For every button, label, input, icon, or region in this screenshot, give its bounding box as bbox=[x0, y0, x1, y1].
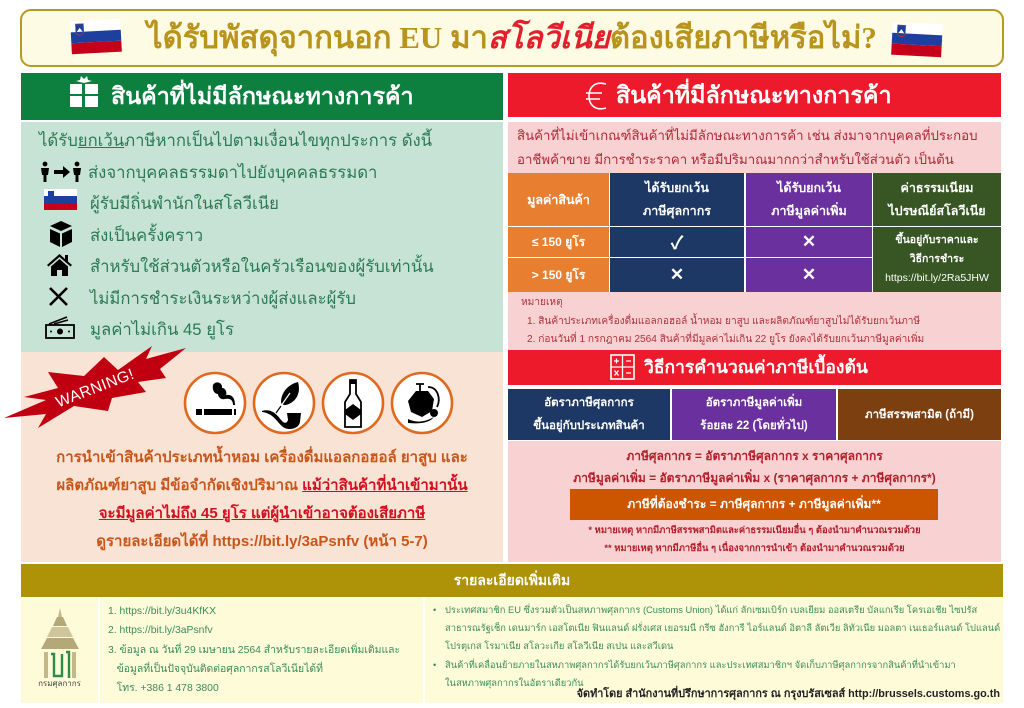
condition 2: ผู้รับมีถิ่นพำนักในสโลวีเนีย bbox=[90, 194, 279, 213]
panel: EU information: สาธารณรัฐเช็ก เดนมาร์ก เอสโตเนีย ฟินแลนด์ ฝรั่งเศส เยอรมนี กรีซ ฮังการี ไอร์แลนด์ อิตาลี ลัตเวีย ลิทัวเนีย มอลตา เนเธอร์แลนด์ โปแลนด์ bbox=[445, 623, 1000, 633]
condition 1: ส่งจากบุคคลธรรมดาไปยังบุคคลธรรมดา bbox=[88, 163, 377, 182]
icon: cross bbox=[49, 287, 68, 306]
rate: customs: อัตราภาษีศุลกากร bbox=[544, 396, 634, 408]
header: value: มูลค่าสินค้า bbox=[527, 192, 590, 206]
icon: gift bbox=[70, 76, 98, 107]
credit line: จัดทำโดย สำนักงานที่ปรึกษาการศุลกากร ณ กรุงบรัสเซลส์ http://brussels.customs.go.th bbox=[577, 688, 1000, 700]
rate: VAT: อัตราภาษีมูลค่าเพิ่ม bbox=[706, 396, 802, 408]
icon: calculator bbox=[610, 354, 635, 380]
cell: VAT cross 2: ✕ bbox=[802, 265, 816, 284]
header: postal fee: ไปรษณีย์สโลวีเนีย bbox=[888, 204, 986, 218]
panel: more details heading bbox=[21, 564, 1003, 597]
condition 4: สำหรับใช้ส่วนตัวหรือในครัวเรือนของผู้รับเท่านั้น bbox=[90, 257, 434, 276]
cell: postal details: https://bit.ly/2Ra5JHW bbox=[885, 272, 989, 284]
conditions intro: ได้รับยกเว้นภาษีหากเป็นไปตามเงื่อนไขทุกประการ ดังนี้ bbox=[39, 131, 432, 150]
panel: non-commercial heading bbox=[21, 73, 503, 120]
contact info: โทร. +386 1 478 3800 bbox=[117, 683, 219, 694]
formula: total: ภาษีที่ต้องชำระ = ภาษีศุลกากร + ภาษีมูลค่าเพิ่ม** bbox=[627, 497, 881, 511]
contact info: ข้อมูลที่เป็นปัจจุบันติดต่อศุลกากรสโลวีเนียได้ที่ bbox=[117, 664, 323, 675]
note heading: หมายเหตุ bbox=[521, 297, 563, 308]
panel: logo bbox=[21, 598, 98, 703]
warning text line 4: ดูรายละเอียดได้ที่ https://bit.ly/3aPsnfv (หน้า 5-7) bbox=[96, 533, 428, 550]
header: customs exempt bbox=[610, 173, 744, 226]
panel: commercial description bbox=[508, 122, 1001, 173]
logo caption: กรมศุลกากร bbox=[38, 679, 81, 688]
icon: person to person bbox=[41, 162, 81, 182]
cell: postal details: ขึ้นอยู่กับราคาและ bbox=[895, 234, 979, 246]
cell: VAT cross 1: ✕ bbox=[802, 232, 816, 251]
condition 6: มูลค่าไม่เกิน 45 ยูโร bbox=[90, 320, 234, 339]
panel: notes bbox=[508, 292, 1001, 350]
row label: over 150: > 150 ยูโร bbox=[532, 268, 585, 282]
cell: customs check bbox=[610, 227, 744, 257]
panel: formulas bbox=[508, 441, 1001, 562]
header: postal fee bbox=[873, 173, 1001, 226]
title banner bbox=[20, 9, 1004, 67]
cell: postal details: วิธีการชำระ bbox=[910, 253, 964, 265]
table: duty exemption bbox=[508, 173, 1001, 292]
panel: warning bbox=[21, 352, 503, 562]
icon: house bbox=[47, 254, 72, 276]
panel: EU information: สินค้าที่เคลื่อนย้ายภายในสหภาพศุลกากรได้รับยกเว้นภาษีศุลกากร และประเทศสมาชิกฯ จัดเก็บภาษีศุลกากรจากสินค้าที่นำเข้ามา bbox=[445, 660, 956, 670]
cell: customs cross bbox=[610, 258, 744, 292]
header: VAT exempt: ภาษีมูลค่าเพิ่ม bbox=[771, 204, 847, 218]
cell: VAT cross 2 bbox=[746, 258, 872, 292]
icon: bottle bbox=[322, 372, 384, 434]
panel: commercial heading bbox=[508, 73, 1001, 117]
icon: Slovenia flag right bbox=[891, 22, 943, 58]
header: customs exempt: ได้รับยกเว้น bbox=[645, 180, 709, 194]
contact info bbox=[108, 642, 400, 694]
note 1: 1. สินค้าประเภทเครื่องดื่มแอลกอฮอล์ น้ำหอม ยาสูบ และผลิตภัณฑ์ยาสูบไม่ได้รับยกเว้นภาษี bbox=[527, 316, 920, 327]
panel: more details heading: รายละเอียดเพิ่มเติม bbox=[454, 572, 570, 588]
link 1: 1. https://bit.ly/3u4KfKX bbox=[108, 606, 216, 617]
cell: customs check: ✓ bbox=[670, 233, 684, 253]
row label: up to 150 bbox=[508, 227, 609, 257]
panel: links bbox=[100, 598, 423, 703]
warning text line 3: จะมีมูลค่าไม่ถึง 45 ยูโร แต่ผู้นำเข้าอาจต้องเสียภาษี bbox=[99, 505, 425, 522]
contact info: 3. ข้อมูล ณ วันที่ 29 เมษายน 2564 สำหรับรายละเอียดเพิ่มเติมและ bbox=[108, 645, 400, 656]
icon: Slovenia flag left bbox=[70, 18, 122, 54]
panel: EU information: ในสหภาพศุลกากรในอัตราเดียวกัน bbox=[445, 678, 584, 688]
calculation heading text: วิธีการคำนวณค่าภาษีเบื้องต้น bbox=[644, 357, 868, 377]
icon: small flag bbox=[44, 189, 77, 210]
rate: VAT: ร้อยละ 22 (โดยทั่วไป) bbox=[700, 420, 808, 432]
formula: VAT: ภาษีมูลค่าเพิ่ม = อัตราภาษีมูลค่าเพิ่ม x (ราคาศุลกากร + ภาษีศุลกากร*) bbox=[573, 471, 936, 485]
bullet 2 bbox=[433, 658, 956, 688]
header: VAT exempt: ได้รับยกเว้น bbox=[777, 180, 841, 194]
bullet 1: • bbox=[433, 605, 436, 615]
description line 2: อาชีพค้าขาย มีการชำระราคา หรือมีปริมาณมากกว่าสำหรับใช้ส่วนตัว เป็นต้น bbox=[517, 152, 954, 167]
header: value bbox=[508, 173, 609, 226]
condition 3: ส่งเป็นครั้งคราว bbox=[90, 226, 203, 245]
bullet 1 bbox=[433, 604, 1000, 652]
description line 1: สินค้าที่ไม่เข้าเกณฑ์สินค้าที่ไม่มีลักษณะทางการค้า เช่น ส่งมาจากบุคคลที่ประกอบ bbox=[517, 128, 978, 143]
cell: postal details bbox=[873, 227, 1001, 292]
link 2: 2. https://bit.ly/3aPsnfv bbox=[108, 625, 213, 636]
note 2: 2. ก่อนวันที่ 1 กรกฎาคม 2564 สินค้าที่มีมูลค่าไม่เกิน 22 ยูโร ยังคงได้รับยกเว้นภาษีมูลค่าเพิ่ม bbox=[527, 334, 924, 345]
row label: up to 150: ≤ 150 ยูโร bbox=[532, 234, 585, 248]
icon: perfume bbox=[390, 372, 454, 434]
header: postal fee: ค่าธรรมเนียม bbox=[900, 180, 974, 194]
icon: euro bbox=[586, 82, 606, 110]
panel: calculation heading bbox=[508, 350, 1001, 385]
icon: money bbox=[45, 316, 75, 339]
icon: warning burst bbox=[4, 346, 186, 428]
cell: customs cross: ✕ bbox=[670, 265, 684, 284]
panel: EU information: ประเทศสมาชิก EU ซึ่งรวมตัวเป็นสหภาพศุลกากร (Customs Union) ได้แก่ ลักเซมเบิร์ก เบลเยียม ออสเตรีย บัลแกเรีย โครเอเชีย ไซปรัส bbox=[445, 605, 977, 615]
icon: customs department logo bbox=[41, 608, 79, 678]
rate: customs: ขึ้นอยู่กับประเภทสินค้า bbox=[533, 420, 645, 432]
bullet 2: • bbox=[433, 660, 436, 670]
rate: VAT bbox=[672, 389, 836, 440]
cell: VAT cross 1 bbox=[746, 227, 872, 257]
rate: excise: ภาษีสรรพสามิต (ถ้ามี) bbox=[865, 408, 974, 420]
row label: over 150 bbox=[508, 258, 609, 292]
title text: ได้รับพัสดุจากนอก EU มาสโลวีเนียต้องเสียภาษีหรือไม่? bbox=[147, 20, 877, 55]
non-commercial heading text: สินค้าที่ไม่มีลักษณะทางการค้า bbox=[111, 83, 414, 109]
header: VAT exempt bbox=[746, 173, 872, 226]
icon: cigarette bbox=[184, 372, 246, 434]
condition 5: ไม่มีการชำระเงินระหว่างผู้ส่งและผู้รับ bbox=[90, 289, 356, 308]
warning text line 1: การนำเข้าสินค้าประเภทน้ำหอม เครื่องดื่มแอลกอฮอล์ ยาสูบ และ bbox=[56, 449, 468, 466]
formula: total bbox=[570, 489, 938, 520]
header: customs exempt: ภาษีศุลกากร bbox=[643, 204, 711, 218]
panel: rate boxes bbox=[508, 389, 1001, 440]
commercial heading text: สินค้าที่มีลักษณะทางการค้า bbox=[616, 82, 892, 108]
footnote 2: ** หมายเหตุ หากมีภาษีอื่น ๆ เนื่องจากการนำเข้า ต้องนำมาคำนวณรวมด้วย bbox=[604, 542, 905, 553]
footnote 1: * หมายเหตุ หากมีภาษีสรรพสามิตและค่าธรรมเนียมอื่น ๆ ต้องนำมาคำนวณรวมด้วย bbox=[588, 524, 921, 535]
rate: excise bbox=[838, 389, 1001, 440]
warning text line 2: ผลิตภัณฑ์ยาสูบ มีข้อจำกัดเชิงปริมาณ แม้ว่าสินค้าที่นำเข้ามานั้น bbox=[56, 477, 468, 494]
icon: pipe and leaf bbox=[252, 372, 316, 434]
rate: customs bbox=[508, 389, 670, 440]
panel: EU information: โปรตุเกส โรมาเนีย สโลวะเกีย สโลวีเนีย สเปน และสวีเดน bbox=[445, 641, 673, 651]
icon: box bbox=[50, 221, 72, 247]
warning label: WARNING! bbox=[54, 366, 137, 411]
panel: non-commercial conditions bbox=[21, 122, 503, 352]
panel: EU information bbox=[425, 598, 1003, 703]
formula: customs: ภาษีศุลกากร = อัตราภาษีศุลกากร x ราคาศุลกากร bbox=[626, 449, 883, 463]
